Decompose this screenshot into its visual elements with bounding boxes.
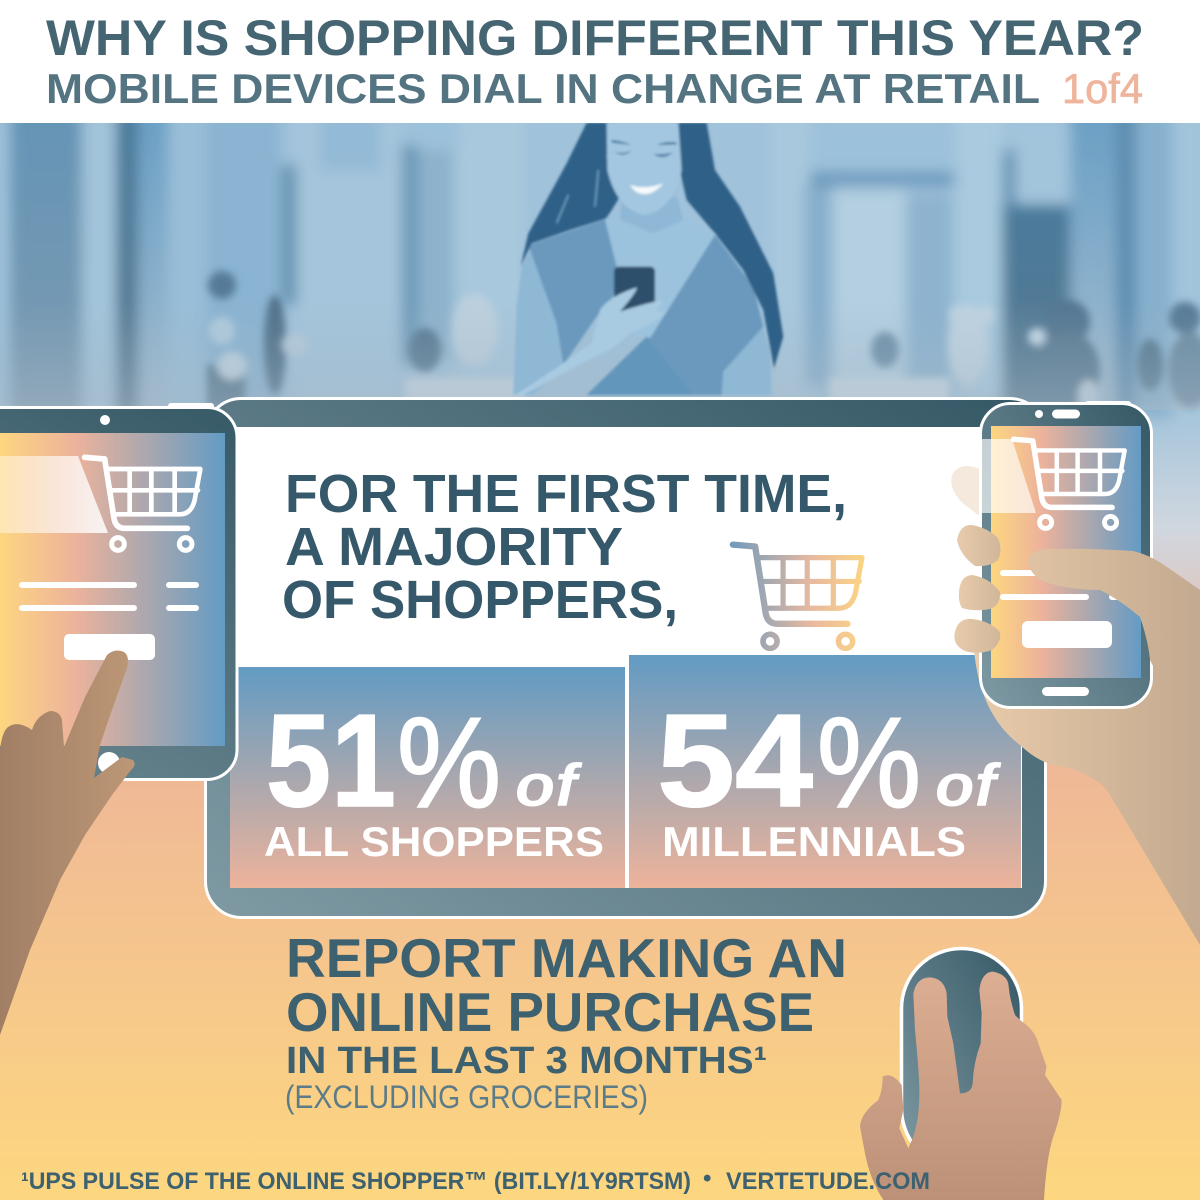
side button [168, 403, 214, 411]
title: WHY IS SHOPPING DIFFERENT THIS YEAR? [46, 10, 1144, 66]
hand on mouse [860, 972, 1062, 1200]
holding hand [515, 287, 667, 395]
device body [0, 408, 237, 780]
bottom copy: IN THE LAST 3 MONTHS¹ [286, 1040, 767, 1082]
stat panel: all shoppers: of [515, 752, 582, 819]
stat panel: all shoppers: 51 [266, 687, 396, 834]
fingers holding phone [954, 525, 1000, 653]
chest [605, 207, 717, 340]
phone [980, 401, 1152, 708]
button [64, 634, 155, 660]
stat panel: all shoppers [230, 667, 625, 888]
hair strands [557, 170, 598, 223]
hair [521, 123, 783, 368]
stat panel: all shoppers: ALL SHOPPERS [264, 818, 604, 865]
tablet body [206, 398, 1046, 918]
left arm [513, 247, 563, 395]
icon: cart [85, 457, 200, 550]
title [46, 10, 1144, 112]
headline on tablet: OF SHOPPERS, [282, 570, 678, 630]
hand pointing at left tablet [0, 651, 135, 1035]
phone body [980, 404, 1152, 708]
bottom copy: (EXCLUDING GROCERIES) [285, 1079, 648, 1115]
button [1022, 621, 1112, 648]
home button [98, 752, 120, 774]
phone [614, 267, 655, 320]
icon: cart [1014, 439, 1125, 529]
right arm [722, 323, 772, 395]
side button [1085, 401, 1131, 409]
left blurred people [208, 271, 236, 299]
text lines [1003, 573, 1125, 597]
tablet white screen [230, 427, 1022, 888]
footer source line: • [703, 1165, 711, 1192]
headline on tablet: FOR THE FIRST TIME, [285, 464, 847, 524]
icon: shopping cart gradient [733, 545, 862, 648]
header band [0, 0, 1200, 123]
dress [528, 219, 763, 395]
screen [991, 426, 1141, 678]
bottom copy [285, 927, 847, 1115]
translucent finger behind phone [951, 466, 985, 520]
glare [981, 439, 1036, 513]
series number: 1of4 [1062, 65, 1143, 112]
camera [100, 415, 110, 425]
screen [0, 433, 225, 746]
right blurred people [948, 305, 988, 385]
hand holding phone: palm and arm [974, 590, 1200, 945]
home button [1042, 687, 1089, 696]
text lines [22, 585, 196, 608]
thumb over phone [1028, 549, 1200, 740]
mouse [902, 948, 1022, 1168]
bottom copy: ONLINE PURCHASE [286, 981, 814, 1043]
headline on tablet: A MAJORITY [285, 517, 623, 577]
left tablet [0, 403, 237, 780]
stat panel: millennials [629, 655, 1021, 888]
stat panel: millennials: of [935, 752, 1001, 819]
footer source line: VERTETUDE.COM [726, 1168, 930, 1195]
stat panel: millennials: MILLENNIALS [662, 818, 966, 865]
neck [620, 197, 683, 233]
stat panel: all shoppers: % [397, 692, 501, 835]
photo: woman with phone in blurred street [0, 123, 1200, 590]
stat panel: millennials: 54 [657, 687, 813, 834]
footer source line: ¹UPS PULSE OF THE ONLINE SHOPPER™ (BIT.LY/1Y9RTSM) [21, 1168, 691, 1195]
bottom copy: REPORT MAKING AN [286, 927, 847, 989]
glare [0, 456, 108, 533]
stat panel: millennials: % [817, 692, 921, 835]
face [607, 123, 682, 215]
main tablet [206, 398, 1046, 918]
speaker and camera [1035, 410, 1043, 418]
headline on tablet [282, 464, 847, 630]
subtitle: MOBILE DEVICES DIAL IN CHANGE AT RETAIL [46, 65, 1040, 112]
